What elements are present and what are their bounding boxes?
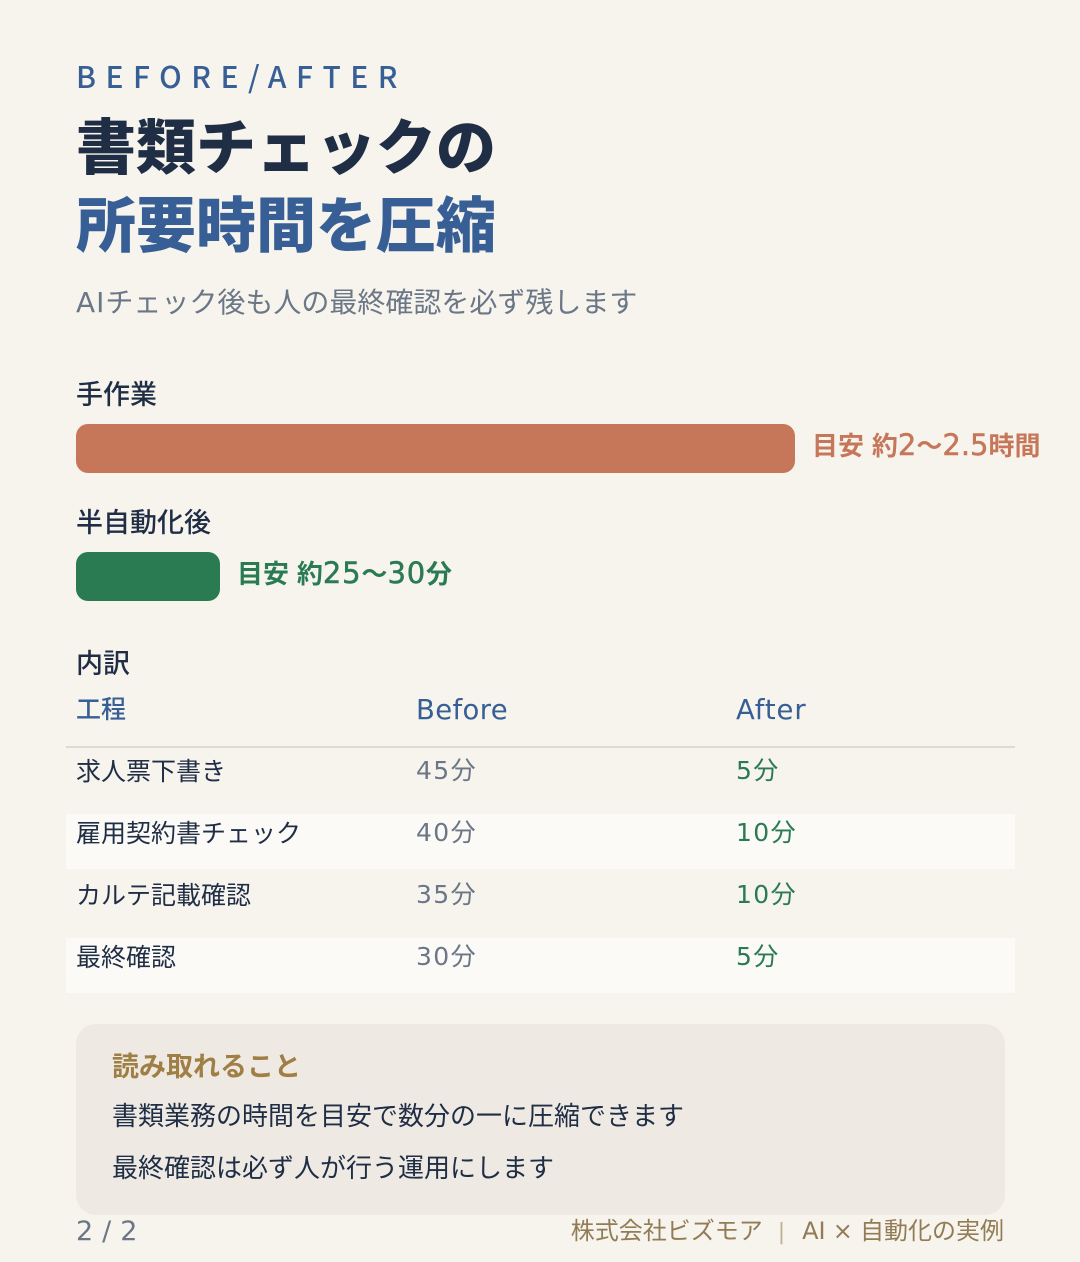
row 3 process: カルテ記載確認 [76,876,251,912]
semi-automated value: 目安 約25〜30分 [237,554,452,591]
row 1 after: 5分 [736,756,780,785]
breakdown heading: 内訳 [76,642,130,681]
table header [66,690,1015,748]
semi-automated label: 半自動化後 [76,501,211,540]
takeaway heading: 読み取れること [112,1045,301,1084]
row 1 before: 45分 [416,756,477,785]
row 2 before: 40分 [416,818,477,847]
header: process: 工程 [76,690,126,726]
row 4 after: 5分 [736,942,780,971]
breakdown table [66,690,1015,993]
semi-automated bar [76,552,220,601]
eyebrow: BEFORE/AFTER [76,53,407,97]
row 2 after: 10分 [736,818,797,847]
header: before: Before [416,694,508,726]
takeaway panel [76,1024,1005,1215]
comparison: manual [76,373,1041,473]
row 3 before: 35分 [416,880,477,909]
title line 2: 所要時間を圧縮 [76,178,496,265]
row 4 [66,938,1015,993]
row 1 [76,752,780,788]
row 1 process: 求人票下書き [76,752,226,788]
row 4 process: 最終確認 [76,938,176,974]
title [76,100,496,265]
manual bar [76,424,795,473]
row 3 after: 10分 [736,880,797,909]
takeaway line 1: 書類業務の時間を目安で数分の一に圧縮できます [112,1096,684,1133]
row 2 [66,814,1015,869]
footer note: 株式会社ビズモア | AI × 自動化の実例 [571,1217,1004,1245]
manual label: 手作業 [76,373,157,412]
title line 1: 書類チェックの [76,100,496,187]
manual value: 目安 約2〜2.5時間 [812,426,1041,463]
takeaway line 2: 最終確認は必ず人が行う運用にします [112,1148,554,1185]
comparison: semi-automated [76,501,452,601]
row 3 [76,876,797,912]
page number: 2 / 2 [76,1216,138,1247]
row 4 before: 30分 [416,942,477,971]
row 2 process: 雇用契約書チェック [76,814,301,850]
header: after: After [736,694,807,726]
subtitle: AIチェック後も人の最終確認を必ず残します [76,286,637,319]
